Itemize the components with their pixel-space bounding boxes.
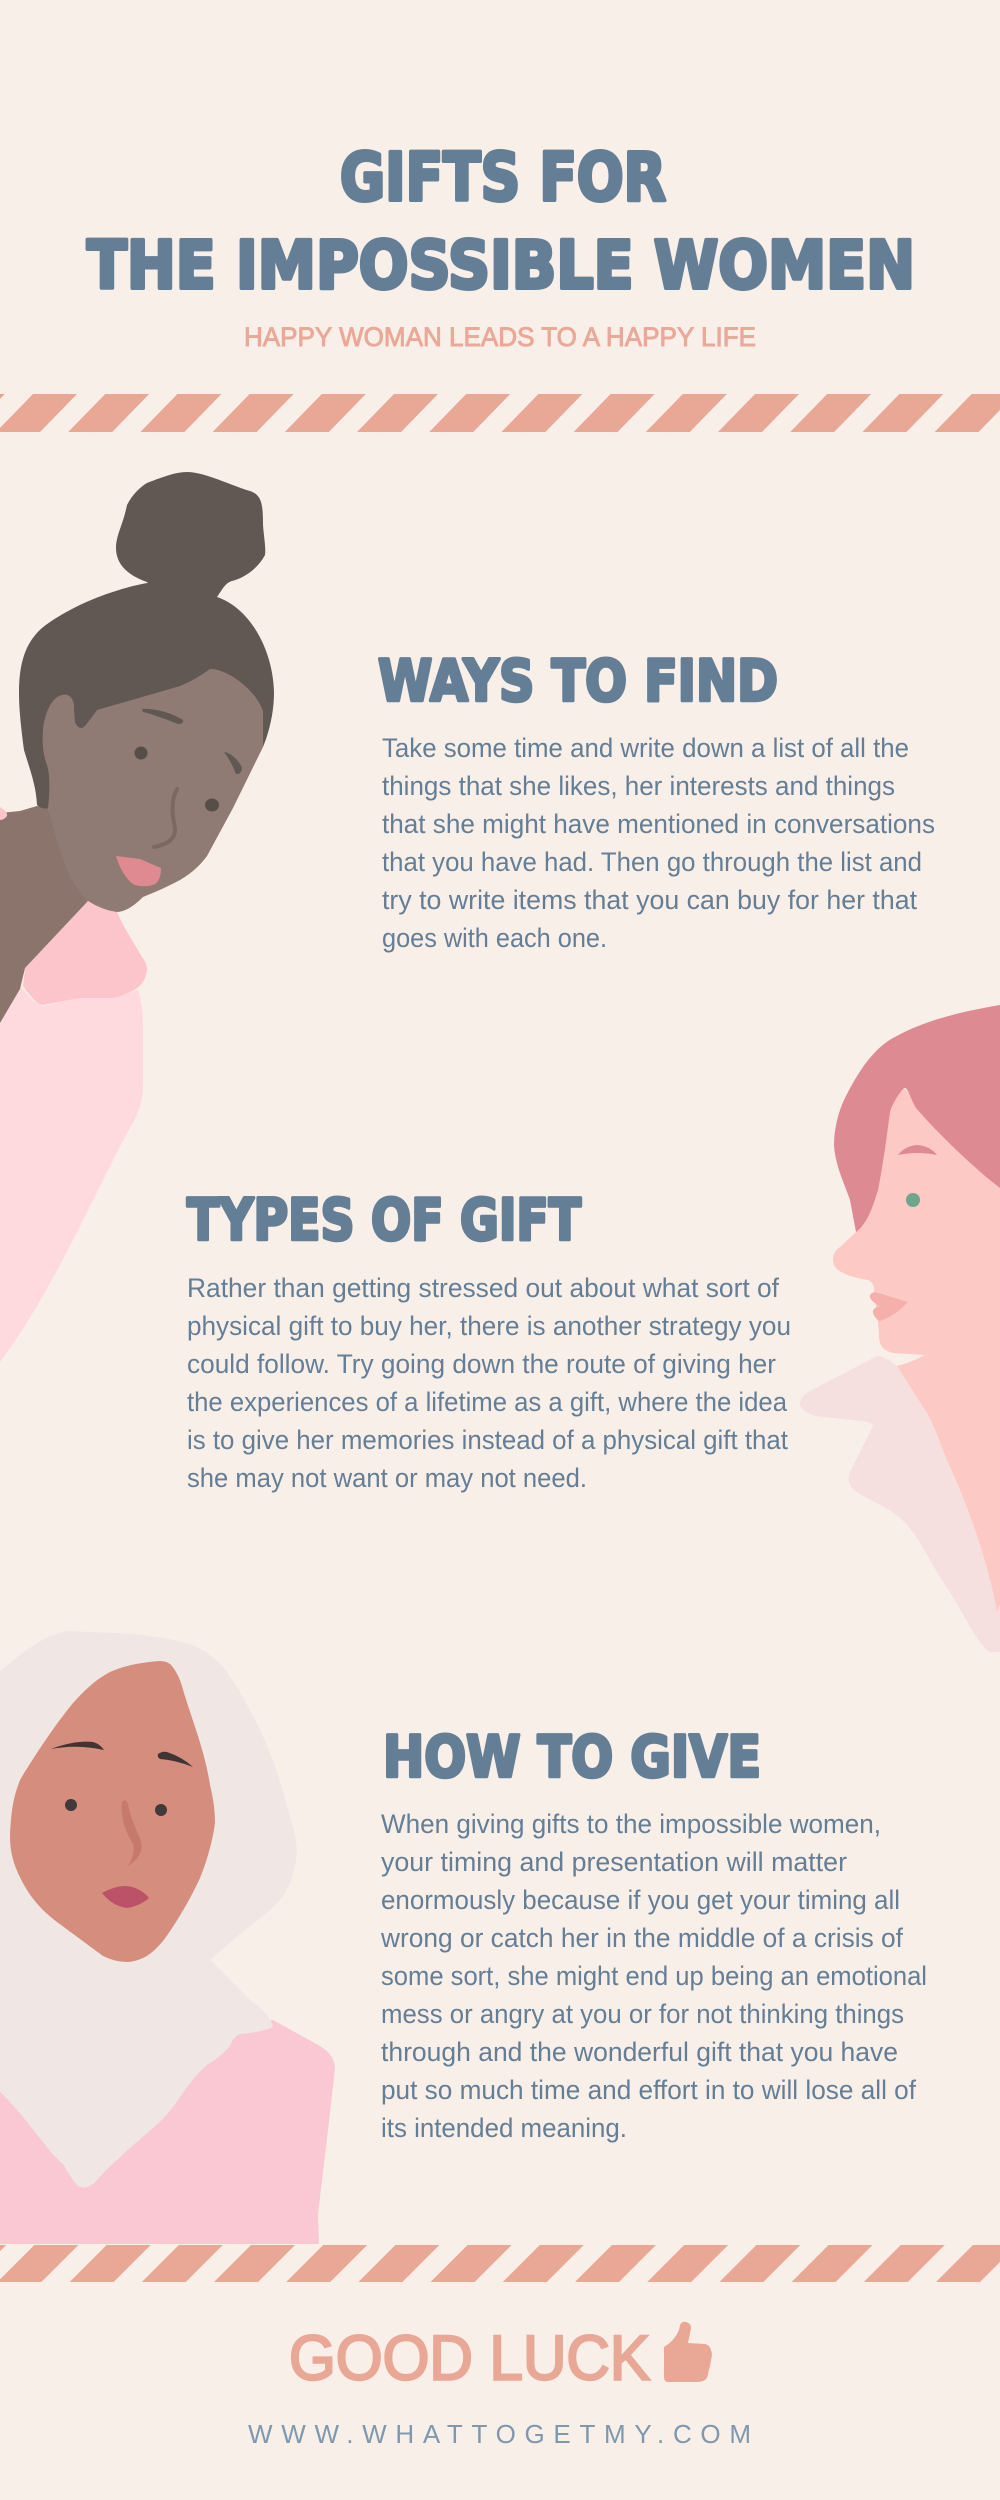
paragraph: how to give: through and the wonderful gift that you have [381, 2037, 898, 2067]
nose [154, 789, 177, 847]
paragraph: types of gift: the experiences of a lifetime as a gift, where the idea [187, 1387, 787, 1417]
paragraph: how to give: wrong or catch her in the middle of a crisis of [380, 1923, 904, 1953]
mouth [102, 1886, 149, 1908]
shoulder accent [0, 807, 7, 820]
blouse [0, 986, 143, 1362]
paragraph: how to give: enormously because if you get your timing all [381, 1885, 900, 1915]
paragraph: types of gift: she may not want or may not need. [187, 1463, 587, 1493]
paragraph: ways to find: things that she likes, her interests and things [382, 771, 895, 801]
headscarf [0, 1631, 297, 2188]
eye right [155, 1804, 167, 1816]
icon: thumbs up [664, 2322, 712, 2382]
illustration: woman with hair bun [0, 472, 274, 1362]
hair bun [116, 472, 265, 600]
mouth [116, 856, 161, 886]
hair [834, 1005, 1000, 1232]
paragraph: how to give: its intended meaning. [381, 2113, 627, 2143]
lips [870, 1292, 908, 1321]
collar [800, 1356, 1000, 1652]
paragraph: how to give: mess or angry at you or for not thinking things [381, 1999, 904, 2029]
face [10, 1661, 215, 1962]
face and neck [833, 1088, 1000, 1612]
eyebrow [898, 1145, 937, 1155]
face [43, 669, 263, 912]
title [87, 139, 915, 304]
text block: types of gift [187, 1188, 791, 1493]
paragraph: how to give [380, 1809, 927, 2143]
eye right [205, 798, 219, 812]
illustration: woman in profile [800, 1005, 1000, 1652]
neck [0, 806, 88, 1023]
paragraph: types of gift: could follow. Try going down the route of giving her [187, 1349, 776, 1379]
paragraph: how to give: When giving gifts to the impossible women, [381, 1809, 881, 1839]
paragraph: types of gift: is to give her memories instead of a physical gift that [187, 1425, 789, 1455]
paragraph: ways to find: try to write items that you can buy for her that [382, 885, 918, 915]
good luck text: GOOD LUCK [289, 2324, 650, 2394]
paragraph: ways to find: that she might have mentioned in conversations [382, 809, 935, 839]
heading: ways to find: WAYS TO FIND [378, 648, 778, 714]
text block: how to give [380, 1724, 927, 2143]
paragraph: ways to find: that you have had. Then go through the list and [382, 847, 922, 877]
title: THE IMPOSSIBLE WOMEN [87, 227, 915, 304]
hair [19, 583, 274, 809]
paragraph: types of gift: Rather than getting stressed out about what sort of [187, 1273, 780, 1303]
paragraph: ways to find: Take some time and write down a list of all the [382, 733, 909, 763]
paragraph: how to give: some sort, she might end up being an emotional [381, 1961, 927, 1991]
bottom striped band [0, 2245, 1000, 2282]
paragraph: how to give: put so much time and effort in to will lose all of [381, 2075, 917, 2105]
eyebrows [51, 1742, 193, 1767]
paragraph: types of gift: physical gift to buy her, there is another strategy you [187, 1311, 791, 1341]
subtitle: HAPPY WOMAN LEADS TO A HAPPY LIFE [244, 322, 756, 352]
blouse [0, 2020, 335, 2244]
eye [906, 1193, 920, 1207]
eye left [65, 1799, 77, 1811]
text block: ways to find [378, 648, 935, 953]
website url: WWW.WHATTOGETMY.COM [248, 2419, 751, 2449]
paragraph: types of gift [187, 1273, 791, 1493]
title: GIFTS FOR [340, 139, 666, 216]
heading: types of gift: TYPES OF GIFT [187, 1188, 581, 1254]
nose [122, 1800, 142, 1866]
eyes and brows [142, 709, 242, 774]
eye left [134, 746, 148, 760]
paragraph: ways to find [382, 733, 935, 953]
paragraph: how to give: your timing and presentation will matter [381, 1847, 847, 1877]
top striped band [0, 394, 1000, 432]
paragraph: ways to find: goes with each one. [382, 923, 607, 953]
heading: how to give: HOW TO GIVE [383, 1724, 761, 1790]
collar [23, 901, 147, 1005]
illustration: woman in headscarf [0, 1631, 335, 2244]
